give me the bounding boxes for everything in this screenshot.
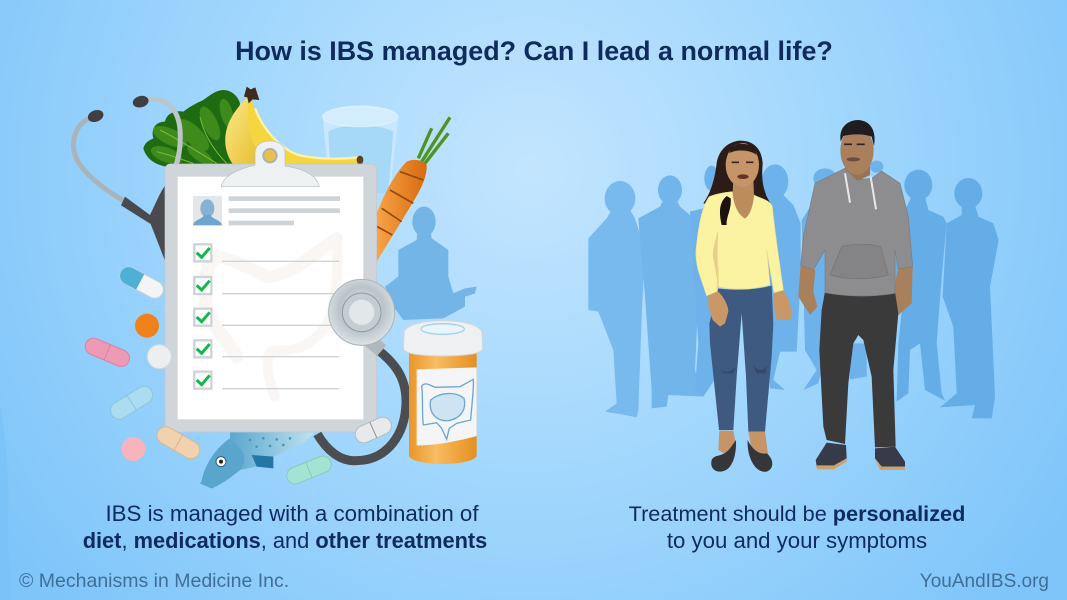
icon: orange pill: [135, 314, 159, 338]
icon: colon watermark: [205, 238, 337, 397]
shoes: [711, 440, 772, 472]
icon: carrot: [377, 117, 450, 262]
caption: right: Treatment should be personalized: [629, 501, 965, 526]
hands: [708, 290, 791, 327]
icon: blue and white capsule: [117, 264, 166, 301]
checklist: [194, 244, 339, 389]
arms: [798, 265, 913, 315]
person: man: [798, 120, 913, 470]
head: [840, 127, 874, 175]
icon: white capsule on tube: [352, 414, 394, 446]
icon: bananas: [225, 87, 363, 167]
silhouette person 5: [802, 168, 837, 390]
illustration: management tools: [74, 87, 483, 488]
hair: [703, 141, 770, 225]
icon: white pill: [147, 345, 171, 369]
silhouette person 6: [850, 161, 883, 379]
legs: [709, 286, 773, 432]
text lines: [229, 196, 340, 225]
icon: pill bottle: [403, 321, 483, 464]
icon: leafy greens: [143, 90, 240, 178]
neck and chest: [733, 178, 754, 218]
icon: meditating person silhouette: [385, 207, 477, 320]
icon: mint capsule: [284, 454, 334, 486]
icon: stethoscope chest piece and tube: [317, 279, 406, 461]
hoodie: [801, 168, 913, 296]
silhouette person 1: [588, 181, 645, 417]
face: [726, 143, 759, 187]
person: woman: [696, 141, 791, 472]
ankles: [718, 431, 768, 463]
sweater: [696, 192, 783, 296]
icon: pink pill: [121, 437, 145, 461]
panel: clipboard: [165, 141, 377, 432]
title: How is IBS managed? Can I lead a normal life?: [235, 36, 833, 66]
silhouette person 2: [638, 175, 703, 408]
caption: right second line: to you and your symptoms: [667, 528, 927, 553]
silhouette crowd: [588, 161, 999, 418]
illustration: people: [588, 120, 999, 472]
icon: fish: [200, 430, 317, 488]
icon: clip: [221, 141, 319, 187]
pills: [83, 264, 334, 486]
pants: [819, 292, 898, 447]
curls: [720, 196, 731, 225]
icon: patient avatar: [193, 196, 222, 225]
caption: left: IBS is managed with a combination of: [105, 501, 479, 526]
silhouette person 8: [940, 178, 999, 418]
icon: glass of water: [323, 105, 398, 193]
shoe soles: [816, 458, 905, 470]
silhouette person 4: [750, 164, 801, 390]
silhouette person 3: [690, 166, 719, 397]
icon: light blue capsule: [107, 383, 156, 422]
shoes: [816, 443, 905, 467]
silhouette person 7: [890, 170, 947, 402]
footer: website: YouAndIBS.org: [920, 571, 1049, 592]
icon: pink capsule: [83, 336, 132, 369]
footer: copyright: © Mechanisms in Medicine Inc.: [19, 570, 289, 592]
icon: beige capsule: [154, 423, 203, 462]
neck: [845, 160, 870, 182]
caption: left emphasis: diet, medications, and other treatments: [83, 528, 487, 553]
icon: stethoscope tubing: [74, 94, 180, 265]
